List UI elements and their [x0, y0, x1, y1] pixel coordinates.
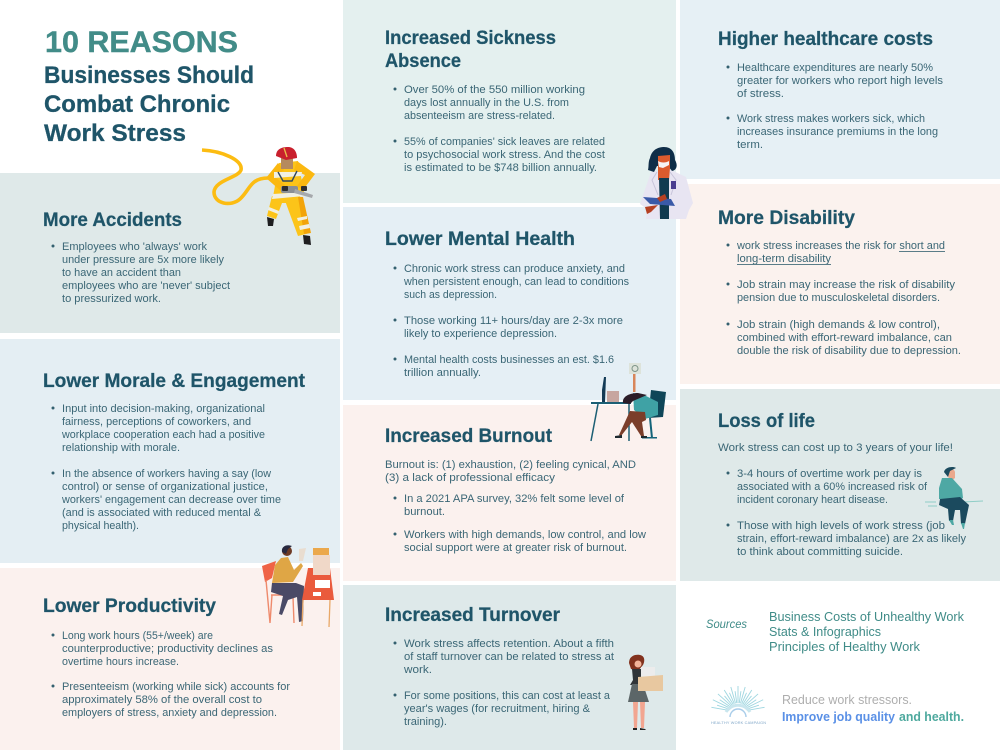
text: disability bullets: work stress increases the risk for short and	[736, 240, 945, 252]
text: morale bullets: relationship with morale.	[62, 442, 180, 454]
panel: increased sickness absence: Increased Sickness	[385, 27, 556, 49]
panel: higher healthcare costs: Higher healthcare costs	[718, 28, 933, 50]
text: burnout definition: Burnout is: (1) exhaustion, (2) feeling cynical, AND	[385, 459, 636, 471]
text: accidents bullet: to pressurized work.	[62, 293, 161, 305]
text: burnout definition	[385, 459, 636, 484]
sources: Business Costs of Unhealthy Work	[769, 609, 964, 624]
panel: increased turnover: Increased Turnover	[385, 604, 560, 626]
text: disability bullets: Job strain (high demands & low control),	[737, 319, 940, 331]
panel: lower mental health: Lower Mental Health	[385, 228, 575, 250]
text: mental health bullets	[394, 263, 629, 379]
text: healthcare bullets	[726, 62, 943, 151]
text: productivity bullets	[52, 630, 290, 719]
text: loss of life bullets: strain, effort-reward imbalance) are 2x as likely	[737, 533, 966, 545]
text: sickness bullets: to psychosocial work stress. And the cost	[404, 149, 606, 161]
text: turnover bullets: of staff turnover can be related to stress at	[404, 651, 615, 663]
text: loss of life bullets: 3-4 hours of overtime work per day is	[737, 468, 922, 480]
text: morale bullets: workers' engagement can decrease over time	[61, 494, 281, 506]
panel: higher healthcare costs	[680, 0, 1000, 179]
text: sickness bullets: 55% of companies' sick leaves are related	[404, 136, 605, 148]
text: accidents bullet: employees who are 'never' subject	[62, 280, 231, 292]
text: productivity bullets: approximately 58% of the overall cost to	[62, 694, 262, 706]
text: loss of life bullets: to think about committing suicide.	[737, 546, 903, 558]
tagline: Reduce work stressors.	[782, 692, 912, 707]
text: loss of life bullets: incident coronary heart disease.	[737, 494, 888, 506]
text: disability bullets: double the risk of disability due to depression.	[737, 345, 961, 357]
text: burnout bullets: Workers with high demands, low control, and low	[404, 529, 647, 541]
text: healthcare bullets: term.	[737, 139, 763, 151]
text: productivity bullets: counterproductive; productivity declines as	[62, 643, 273, 655]
title	[44, 26, 254, 147]
text: disability bullets: Job strain may increase the risk of disability	[737, 279, 955, 291]
panel: lower morale and engagement	[0, 339, 340, 563]
panel: lower productivity: Lower Productivity	[43, 595, 216, 617]
panel: increased sickness absence	[343, 0, 676, 203]
text: burnout bullets: burnout.	[404, 506, 445, 518]
text: burnout definition: (3) a lack of professional efficacy	[385, 472, 555, 484]
title: 10 REASONS	[45, 26, 238, 59]
text: accidents bullet: Employees who 'always' work	[62, 241, 207, 253]
text: morale bullets: workplace cooperation each had a positive	[61, 429, 265, 441]
text: morale bullets: fairness, perceptions of coworkers, and	[62, 416, 251, 428]
title: Combat Chronic	[44, 91, 230, 118]
text: sickness bullets: days lost annually in the U.S. from	[404, 97, 569, 109]
text: healthcare bullets: Work stress makes workers sick, which	[737, 113, 925, 125]
panel: lower morale and engagement: Lower Morale & Engagement	[43, 370, 305, 392]
text: morale bullets: (and is associated with reduced mental &	[62, 507, 262, 519]
text: productivity bullets: employers of stress, anxiety and depression.	[62, 707, 277, 719]
sources: Sources	[706, 617, 747, 631]
title: Work Stress	[44, 120, 186, 147]
panel: lower mental health	[343, 207, 676, 400]
sources: Principles of Healthy Work	[769, 639, 920, 654]
panel: loss of life	[680, 389, 1000, 581]
text: loss of life bullets: associated with a 60% increased risk of	[737, 481, 928, 493]
icon: healthy work campaign logo: HEALTHY WORK CAMPAIGN	[711, 721, 766, 725]
text: turnover bullets: year's wages (for recruitment, hiring &	[404, 703, 591, 715]
title: Businesses Should	[44, 62, 254, 89]
text: burnout bullets: In a 2021 APA survey, 32% felt some level of	[404, 493, 625, 505]
panel: more accidents: More Accidents	[43, 209, 182, 231]
text: disability bullets: long-term disability	[737, 253, 831, 265]
text: mental health bullets: trillion annually.	[404, 367, 481, 379]
text: healthcare bullets: Healthcare expenditures are nearly 50%	[737, 62, 933, 74]
sources: Stats & Infographics	[769, 624, 881, 639]
text: turnover bullets: For some positions, this can cost at least a	[404, 690, 611, 702]
text: healthcare bullets: of stress.	[737, 88, 784, 100]
text: productivity bullets: Presenteeism (working while sick) accounts for	[62, 681, 290, 693]
text: morale bullets: physical health).	[62, 520, 139, 532]
panel: increased burnout	[343, 405, 676, 581]
text: morale bullets: control) or sense of organizational justice,	[62, 481, 268, 493]
text: morale bullets	[52, 403, 281, 532]
text: disability bullets: combined with effort-reward imbalance, can	[737, 332, 952, 344]
text: sickness bullets	[394, 84, 606, 174]
icon: man at desk with paperwork	[262, 545, 334, 627]
text: accidents bullet	[52, 241, 231, 305]
icon: firefighter with hose	[202, 147, 315, 245]
icon: exhausted woman at desk	[591, 363, 666, 441]
icon: healthy work campaign logo	[711, 686, 766, 725]
icon: woman carrying a box	[628, 655, 663, 730]
text: mental health bullets: Mental health costs businesses an est. $1.6	[404, 354, 614, 366]
text: loss of life bullets	[726, 468, 966, 558]
icon: seated stressed man	[925, 467, 983, 529]
text: mental health bullets: such as depression.	[404, 289, 497, 301]
text: turnover bullets: training).	[404, 716, 447, 728]
text: mental health bullets: likely to experience depression.	[404, 328, 557, 340]
text: disability bullets	[726, 240, 961, 357]
panel: more accidents	[0, 173, 340, 333]
text: morale bullets: Input into decision-making, organizational	[62, 403, 265, 415]
text: turnover bullets: Work stress affects retention. About a fifth	[404, 638, 614, 650]
text: productivity bullets: Long work hours (55+/week) are	[62, 630, 213, 642]
text: loss of life intro: Work stress can cost up to 3 years of your life!	[718, 442, 953, 454]
text: loss of life bullets: Those with high levels of work stress (job	[737, 520, 945, 532]
text: turnover bullets: work.	[403, 664, 432, 676]
text: disability bullets: pension due to musculoskeletal disorders.	[737, 292, 940, 304]
text: mental health bullets: when persistent enough, can lead to conditions	[403, 276, 629, 288]
text: accidents bullet: to have an accident than	[62, 267, 181, 279]
text: burnout bullets: social support were at greater risk of burnout.	[404, 542, 627, 554]
panel: more disability: More Disability	[718, 207, 855, 229]
text: mental health bullets: Those working 11+ hours/day are 2-3x more	[404, 315, 623, 327]
tagline: and health.	[899, 709, 964, 724]
text: morale bullets: In the absence of workers having a say (low	[62, 468, 272, 480]
text: sickness bullets: is estimated to be $748 billion annually.	[404, 162, 597, 174]
text: sickness bullets: Over 50% of the 550 million working	[404, 84, 585, 96]
panel: loss of life: Loss of life	[718, 410, 815, 432]
tagline	[782, 692, 964, 724]
panel: increased sickness absence: Absence	[385, 50, 461, 72]
panel: lower productivity	[0, 568, 340, 750]
text: sickness bullets: absenteeism are stress-related.	[404, 110, 555, 122]
sources	[706, 609, 964, 654]
text: mental health bullets: Chronic work stress can produce anxiety, and	[404, 263, 625, 275]
panel: increased turnover	[343, 585, 676, 750]
text: burnout bullets	[394, 493, 647, 554]
text: turnover bullets	[394, 638, 615, 728]
text: healthcare bullets: increases insurance premiums in the long	[737, 126, 938, 138]
icon: doctor in white coat	[640, 147, 693, 219]
tagline: Improve job quality	[782, 709, 896, 724]
text: productivity bullets: overtime hours increase.	[62, 656, 179, 668]
panel: increased burnout: Increased Burnout	[385, 425, 552, 447]
text: healthcare bullets: greater for workers who report high levels	[737, 75, 943, 87]
text: accidents bullet: under pressure are 5x more likely	[62, 254, 224, 266]
panel: more disability	[680, 184, 1000, 384]
